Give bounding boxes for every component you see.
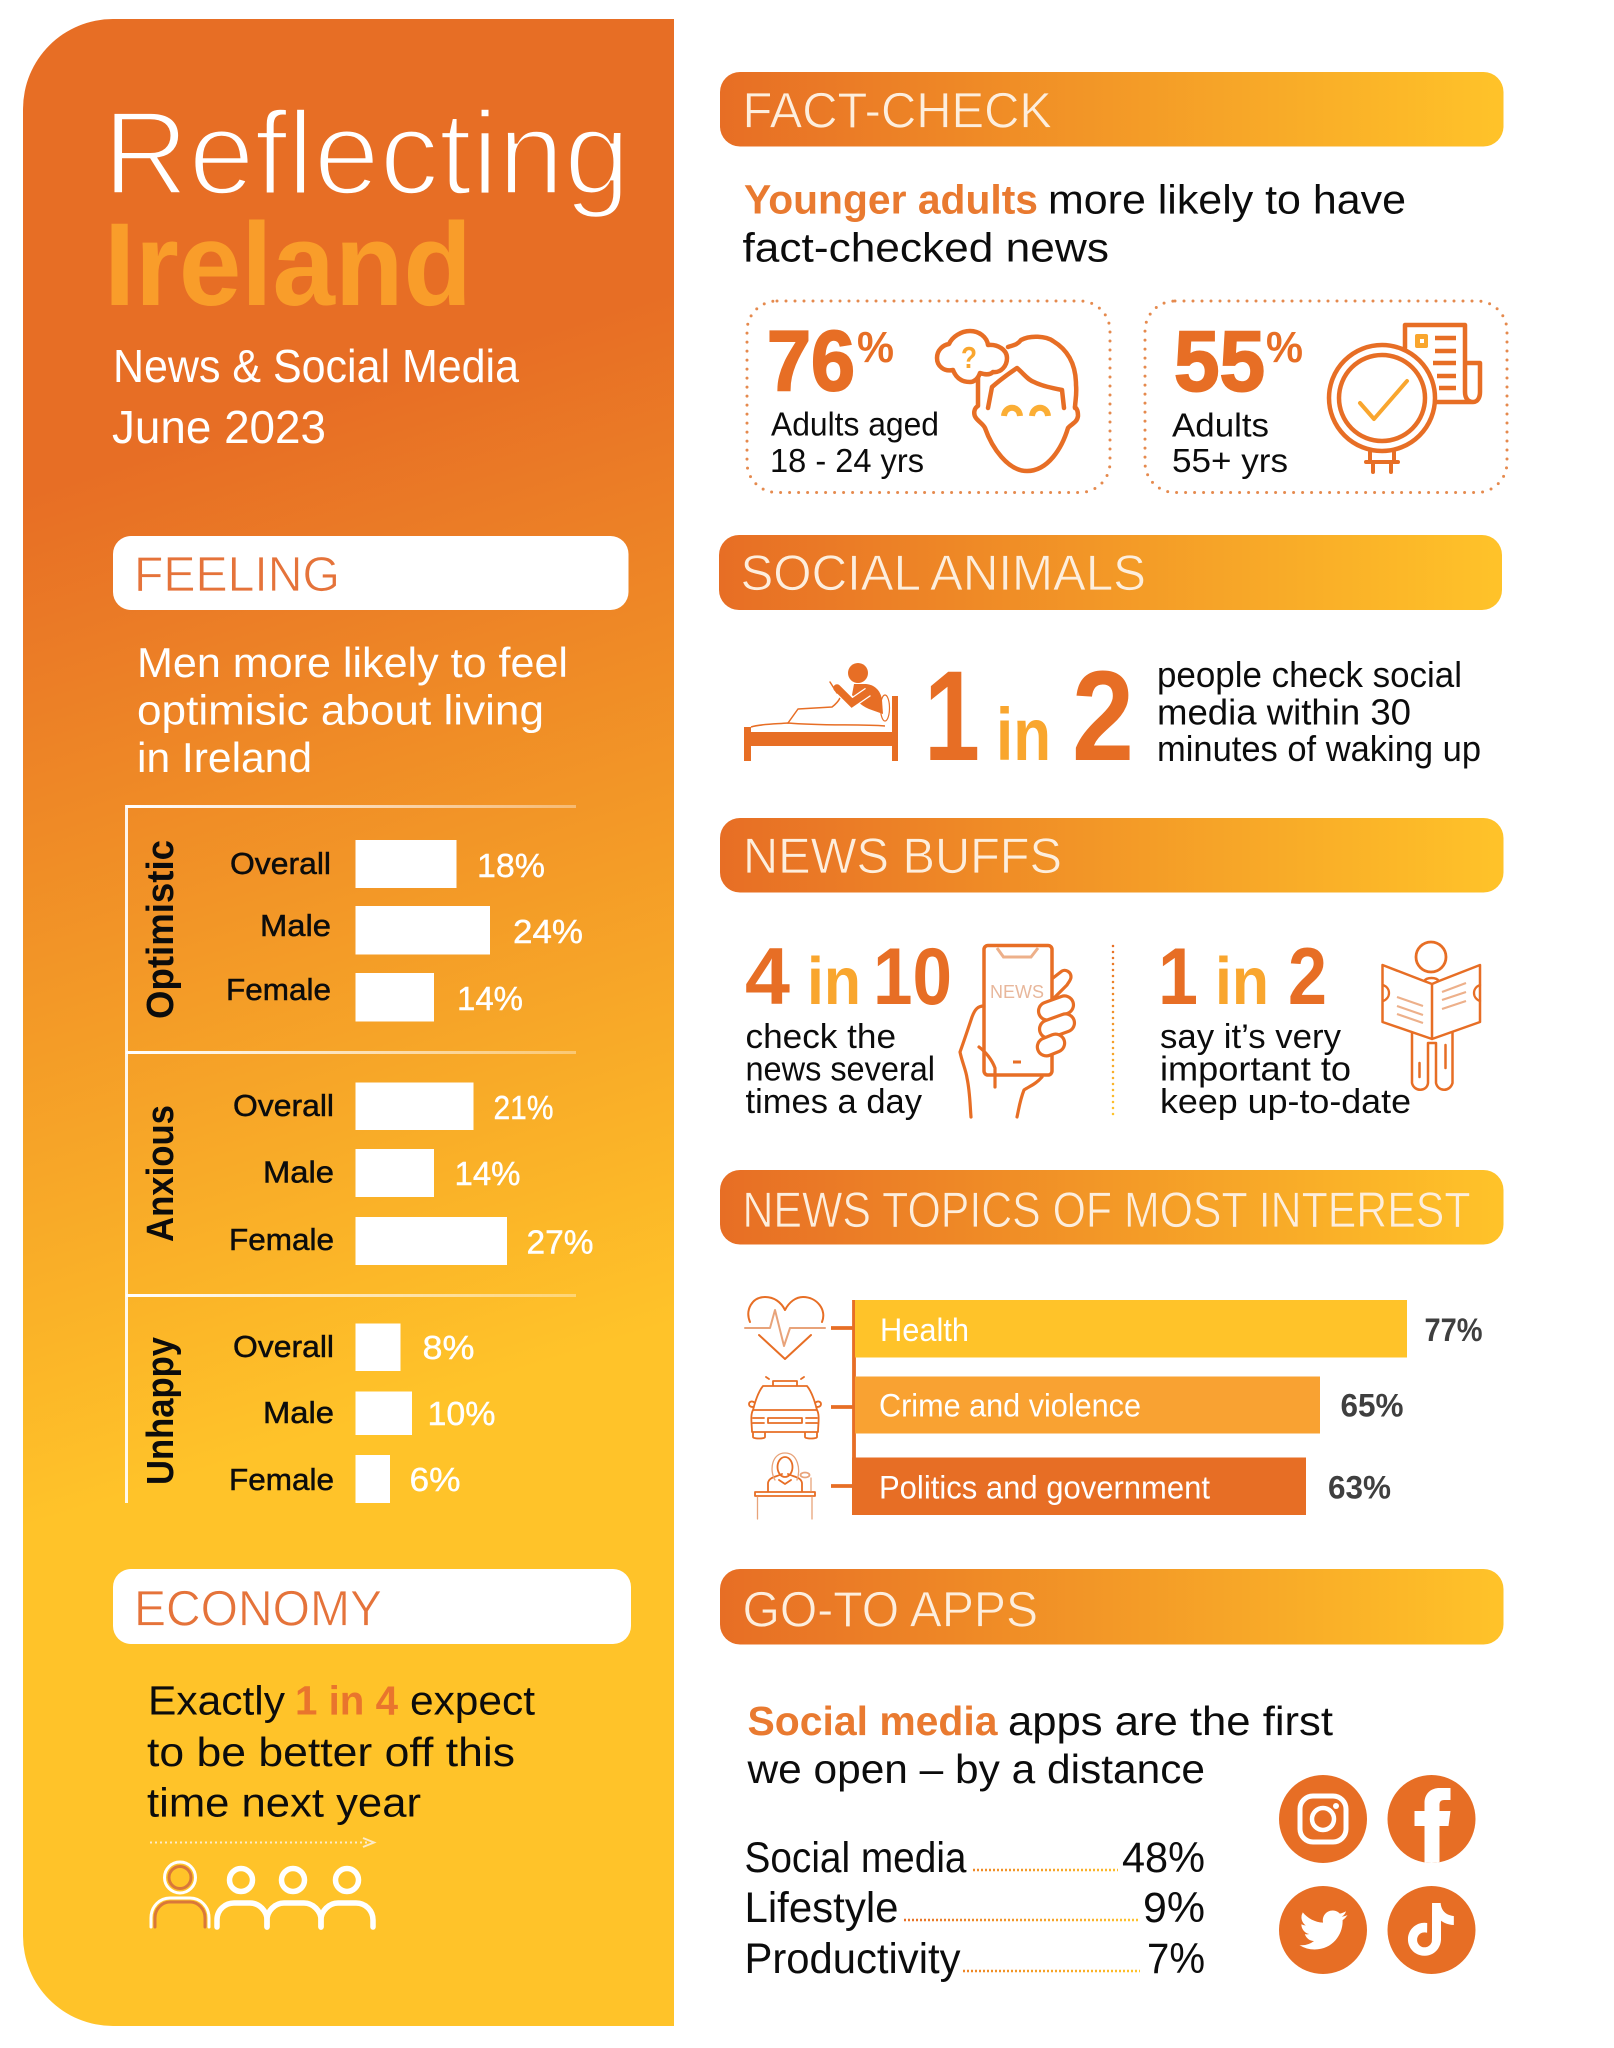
text: say it's very important: say it’s very — [1160, 1018, 1341, 1056]
section: go-to apps — [720, 1569, 1504, 1983]
group: anxious: 21% — [494, 1089, 554, 1126]
card: 55 percent: % — [1266, 323, 1303, 372]
icon: thinking face — [937, 331, 1078, 471]
title — [103, 87, 630, 331]
stat: 4 in 10: 4 — [745, 932, 790, 1022]
group: anxious: 14% — [454, 1155, 520, 1192]
icon: instagram — [1279, 1775, 1367, 1863]
list: app rankings: 9% — [1143, 1884, 1205, 1932]
group: unhappy — [140, 1324, 496, 1503]
text: say it's very important — [1160, 1018, 1411, 1121]
text: men more likely: in Ireland — [137, 734, 312, 781]
heading bar — [720, 1170, 1504, 1244]
text: younger adults — [742, 176, 1406, 270]
text: 1 in 4 — [147, 1678, 536, 1826]
text: men more likely: Men more likely to feel — [137, 639, 568, 686]
heading: economy — [113, 1569, 631, 1644]
group: optimistic: 18% — [477, 847, 545, 884]
chart frame lines — [126, 805, 576, 1503]
group: unhappy: Male — [263, 1395, 334, 1430]
text: check the news — [746, 1018, 935, 1121]
subtitle: June 2023 — [112, 401, 326, 453]
bar: health: 77% — [1424, 1312, 1482, 1348]
list: app rankings: Productivity — [744, 1935, 961, 1983]
group: unhappy: 8% — [422, 1329, 474, 1366]
section: news topics — [720, 1170, 1504, 1519]
heading bar: NEWS BUFFS — [743, 828, 1062, 884]
text: people check social: minutes of waking up — [1157, 728, 1481, 769]
stat: 1 in 2: 1 — [1158, 932, 1198, 1022]
text: 1 in 4: to be better off this — [147, 1729, 515, 1775]
stat: 1 in 2 — [924, 645, 1134, 788]
heading bar: SOCIAL ANIMALS — [740, 545, 1146, 601]
group: optimistic: Female — [226, 972, 331, 1007]
heading: economy: ECONOMY — [134, 1580, 382, 1636]
list: app rankings: Lifestyle — [744, 1884, 898, 1932]
group: unhappy: 10% — [428, 1395, 496, 1432]
group: optimistic: Optimistic — [140, 840, 182, 1019]
panel background — [23, 19, 674, 2026]
bar: politics: 63% — [1328, 1470, 1391, 1506]
bar: crime — [855, 1376, 1404, 1434]
group: anxious: Female — [229, 1222, 334, 1257]
group: unhappy: 6% — [410, 1461, 460, 1498]
stat: 1 in 2: 1 — [924, 645, 980, 788]
group: optimistic: 14% — [457, 980, 523, 1017]
stat: 4 in 10: 10 — [873, 932, 952, 1022]
group: optimistic — [140, 840, 583, 1022]
card: 76 percent: % — [857, 323, 894, 372]
icon: hand holding phone: NEWS — [990, 982, 1044, 1002]
text: men more likely: optimisic about living — [137, 686, 544, 734]
list: app rankings: 48% — [1122, 1834, 1205, 1882]
card: 76 percent: Adults aged — [771, 406, 939, 442]
heading bar: GO-TO APPS — [742, 1582, 1038, 1638]
heading: feeling — [113, 536, 628, 610]
group: anxious — [140, 1082, 594, 1265]
icon: twitter — [1279, 1886, 1367, 1974]
icon: hand holding phone — [960, 946, 1077, 1117]
card: 55 percent: 55 — [1174, 314, 1265, 410]
heading: feeling: FEELING — [134, 548, 340, 602]
heading bar: FACT-CHECK — [742, 82, 1052, 138]
icon: four people — [151, 1862, 373, 1927]
heading bar: NEWS TOPICS OF MOST INTEREST — [742, 1182, 1470, 1238]
stat: 1 in 2: in — [996, 693, 1051, 776]
icon: police car — [749, 1377, 821, 1438]
group: anxious: Overall — [233, 1088, 334, 1123]
text: social media apps: we open – by a distance — [746, 1746, 1205, 1792]
section: fact-check — [720, 72, 1507, 492]
group: optimistic: 24% — [513, 913, 583, 950]
text: social media apps — [746, 1698, 1334, 1792]
title: Reflecting — [103, 87, 630, 220]
group: anxious: 27% — [526, 1224, 594, 1260]
arrow: dotted — [150, 1838, 374, 1847]
heading bar — [720, 72, 1504, 146]
icon: heart pulse — [745, 1297, 825, 1359]
bar: crime: 65% — [1340, 1388, 1404, 1424]
heading bar — [719, 535, 1502, 610]
icon: speaker at podium — [755, 1453, 815, 1519]
group: anxious: Anxious — [140, 1105, 182, 1242]
stat: 4 in 10: in — [807, 944, 861, 1019]
group: unhappy: Unhappy — [140, 1337, 182, 1485]
icon: thinking face: ? — [961, 340, 977, 375]
divider: dotted — [1112, 946, 1114, 1115]
icon: newspaper magnifier — [1329, 325, 1480, 472]
text: say it's very important: keep up-to-date — [1160, 1083, 1411, 1121]
bar: crime: Crime and violence — [879, 1388, 1141, 1424]
list: app rankings: Social media — [744, 1834, 967, 1882]
card: 76 percent: 18 - 24 yrs — [770, 442, 924, 479]
text: people check social — [1157, 654, 1481, 769]
text: people check social: media within 30 — [1157, 692, 1411, 732]
card: 55 percent: 55+ yrs — [1172, 442, 1288, 479]
stat: 1 in 2: 2 — [1072, 645, 1134, 788]
card: 55 percent: Adults — [1172, 406, 1269, 444]
icon: person in bed — [744, 663, 898, 761]
group: optimistic: Overall — [230, 846, 331, 881]
text: men more likely — [137, 639, 568, 781]
list: app rankings — [744, 1834, 1205, 1983]
card: 76 percent — [747, 301, 1110, 492]
card: 55 percent — [1145, 301, 1507, 492]
text: check the news: news several — [746, 1050, 935, 1088]
subtitle: News & Social Media — [113, 340, 519, 392]
stat: 4 in 10 — [745, 932, 952, 1022]
text: younger adults: fact-checked news — [742, 224, 1109, 270]
bar: health: Health — [880, 1312, 969, 1348]
stat: 1 in 2 — [1158, 932, 1327, 1022]
text: social media apps: Social media — [748, 1698, 999, 1744]
heading bar — [720, 1569, 1504, 1644]
text: 1 in 4: 1 in 4 — [295, 1678, 398, 1724]
stat: 1 in 2: 2 — [1288, 932, 1327, 1022]
text: younger adults: more likely to have — [1048, 176, 1406, 222]
group: unhappy: Female — [229, 1462, 334, 1497]
icon: facebook — [1388, 1775, 1476, 1864]
text: 1 in 4: Exactly — [148, 1678, 286, 1724]
group: unhappy: Overall — [233, 1329, 334, 1364]
text: social media apps: apps are the first — [1008, 1698, 1334, 1744]
text: 1 in 4: expect — [410, 1678, 536, 1724]
bar: politics — [852, 1458, 1391, 1515]
bar: health — [855, 1300, 1482, 1358]
icon: tiktok — [1388, 1886, 1476, 1974]
panel: left column — [23, 19, 674, 2026]
section: news buffs — [720, 818, 1504, 1121]
section: social animals — [719, 535, 1502, 788]
axis and ticks — [831, 1300, 854, 1515]
title: Ireland — [104, 199, 472, 331]
text: younger adults: Younger adults — [744, 176, 1038, 222]
text: people check social: people check social — [1157, 654, 1462, 695]
text: say it's very important: important to — [1160, 1050, 1351, 1088]
card: 76 percent: 76 — [767, 314, 855, 409]
text: check the news: times a day — [746, 1083, 922, 1121]
bar: politics: Politics and government — [879, 1470, 1210, 1506]
text: check the news: check the — [746, 1018, 896, 1056]
icon: person reading newspaper — [1382, 942, 1480, 1090]
group: anxious: Male — [263, 1154, 334, 1190]
subtitle — [112, 340, 519, 453]
group: optimistic: Male — [260, 908, 331, 943]
bar chart: topics — [745, 1297, 1482, 1519]
heading bar — [720, 818, 1504, 892]
bar chart: feelings — [126, 805, 594, 1503]
stat: 1 in 2: in — [1215, 944, 1269, 1019]
text: 1 in 4: time next year — [147, 1780, 421, 1826]
list: app rankings: 7% — [1147, 1935, 1205, 1983]
